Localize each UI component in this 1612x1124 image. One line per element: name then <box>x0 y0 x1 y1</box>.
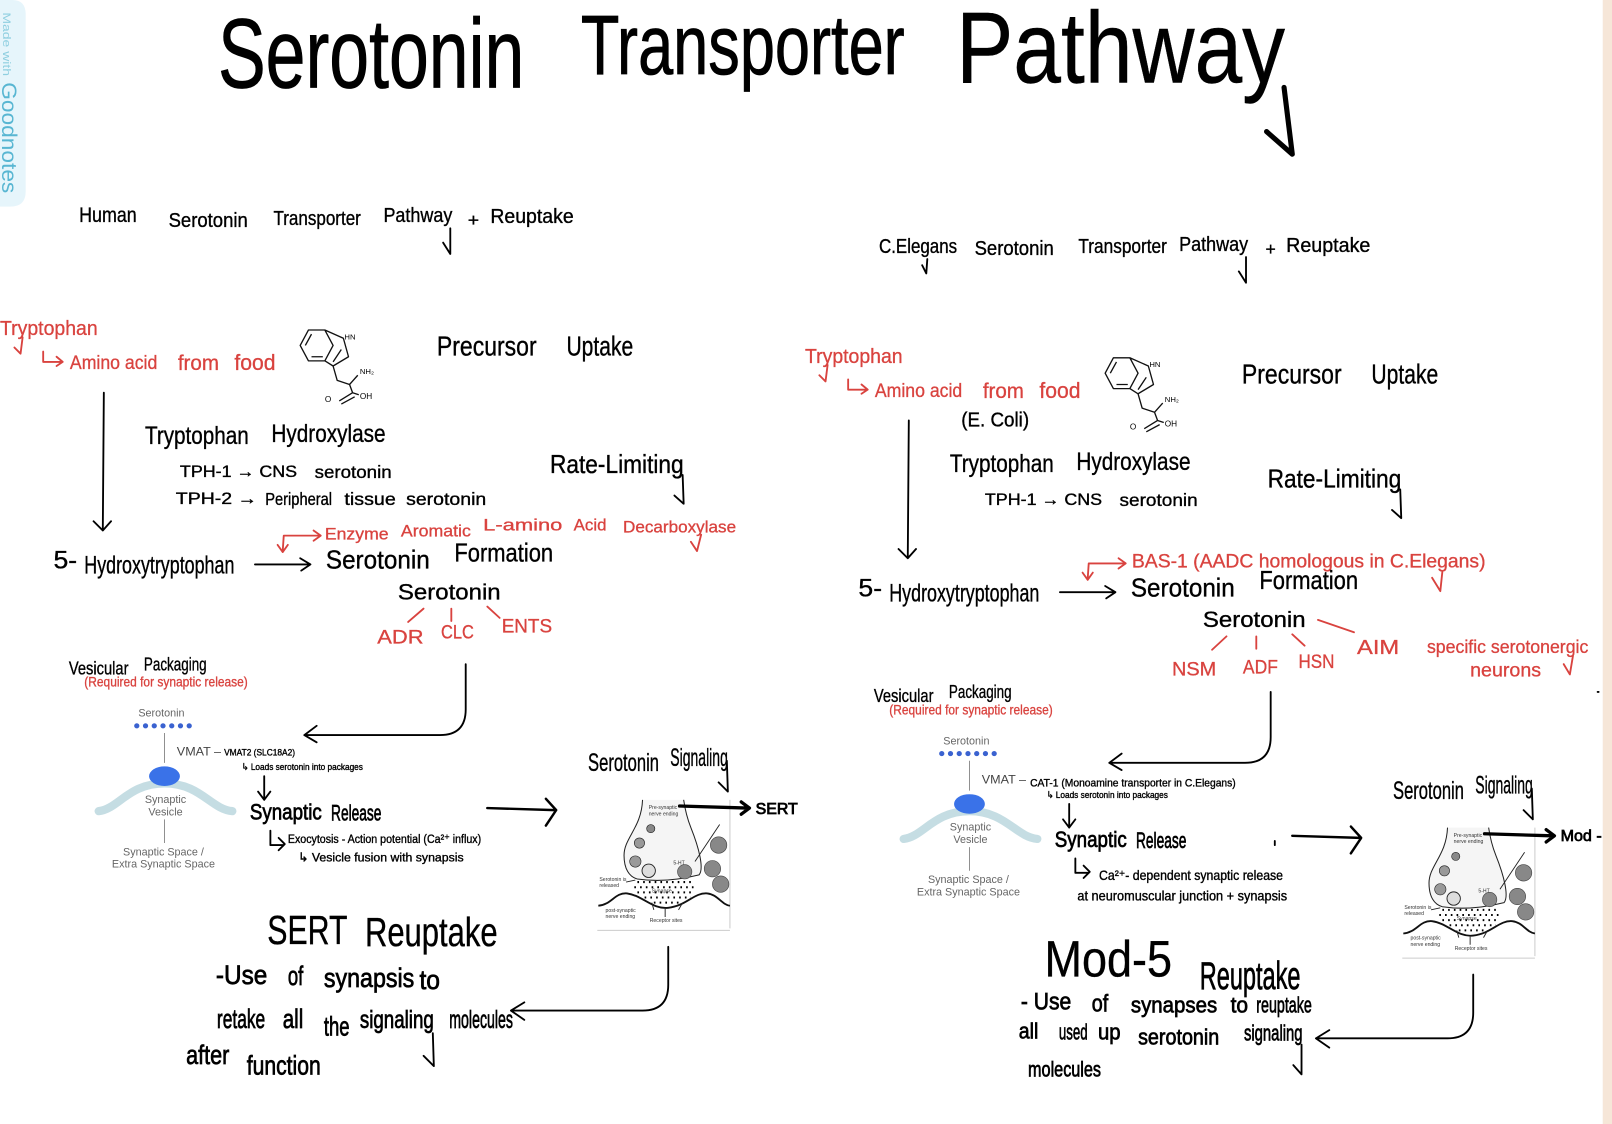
arrow: serotonin to vesicular packaging <box>304 664 466 742</box>
diagram: synapse <box>1402 828 1536 958</box>
label: precursor uptake: Precursor <box>1242 358 1342 389</box>
enzyme: aromatic L-amino acid decarboxylase <box>278 516 736 552</box>
label: synaptic release: Synaptic <box>1055 827 1127 852</box>
label: synaptic release: Synaptic <box>250 799 322 824</box>
precursor: tryptophan note: Amino acid <box>875 380 962 402</box>
heading: vesicular packaging <box>874 681 1053 718</box>
diagram: synapse: post-synaptic <box>1410 936 1441 942</box>
text: SERT reuptake description: after <box>186 1040 229 1070</box>
text: SERT reuptake description: molecules <box>449 1007 513 1034</box>
label: serotonin neurons: AIM <box>1357 636 1399 659</box>
note: VMAT CAT-1: ↳ Loads serotonin into packages <box>1047 790 1168 800</box>
label: precursor uptake: Uptake <box>566 331 633 362</box>
diagram: synapse: Pre-synaptic <box>1454 833 1483 839</box>
arrow: tryptophan to 5-HTP <box>94 393 111 530</box>
label: 5-hydroxytryptophan: Hydroxytryptophan <box>84 553 234 580</box>
enzyme: tryptophan hydroxylase: serotonin <box>315 462 392 482</box>
label: synaptic release: Ca²⁺- dependent synaptic release <box>1099 868 1283 883</box>
heading: human pathway: Serotonin <box>169 209 248 232</box>
label: SERT: SERT <box>756 801 798 818</box>
label: Mod-: Mod - <box>1561 828 1602 845</box>
text: Mod-5 reuptake description <box>1019 990 1312 1081</box>
diagram: synapse: 5-HT <box>1478 888 1491 894</box>
arrow: release to signaling <box>487 799 556 826</box>
label: serotonin neurons: Serotonin <box>398 579 501 604</box>
heading: vesicular packaging <box>69 653 248 690</box>
icon: tryptophan molecule: O <box>1130 423 1136 432</box>
text: SERT reuptake description: synapsis <box>324 963 414 993</box>
precursor: tryptophan note <box>805 345 1080 403</box>
label: serotonin neurons: ADR <box>377 627 424 649</box>
diagram: synaptic vesicle: Vesicle <box>953 834 988 846</box>
enzyme: aromatic L-amino acid decarboxylase: Decarboxylase <box>623 519 736 537</box>
enzyme: tryptophan hydroxylase: tissue <box>344 489 396 509</box>
enzyme: aromatic L-amino acid decarboxylase: Aromatic <box>401 523 471 541</box>
stray pen marks <box>1275 692 1599 845</box>
note: VMAT: VMAT2 (SLC18A2) <box>224 748 295 758</box>
heading: vesicular packaging: Packaging <box>949 681 1012 702</box>
enzyme: tryptophan hydroxylase: Tryptophan <box>145 423 249 450</box>
diagram: synaptic vesicle: Serotonin <box>943 735 989 747</box>
label: serotonin signaling: Serotonin <box>1393 778 1464 805</box>
label: precursor uptake <box>437 331 633 362</box>
label: 5-hydroxytryptophan <box>858 575 1039 607</box>
heading: SERT reuptake: SERT <box>267 907 347 953</box>
text: Mod-5 reuptake description: synapses <box>1131 993 1217 1018</box>
label: synaptic release: Release <box>331 800 381 825</box>
heading: human pathway: Human <box>79 202 137 227</box>
label: precursor uptake: Precursor <box>437 331 537 362</box>
text: Mod-5 reuptake description: signaling <box>1244 1020 1303 1045</box>
precursor: tryptophan note: from <box>983 378 1024 403</box>
diagram: synapse: 5-HT <box>673 861 686 867</box>
enzyme: tryptophan hydroxylase: serotonin <box>1120 490 1198 510</box>
text: SERT reuptake description: the <box>324 1011 350 1041</box>
label: serotonin neurons: ENTS <box>502 615 552 637</box>
text: Mod-5 reuptake description: used <box>1059 1019 1088 1044</box>
icon: tryptophan molecule: NH₂ <box>1165 395 1179 404</box>
label: serotonin formation <box>326 539 553 575</box>
diagram: synaptic vesicle: Synaptic <box>950 822 992 834</box>
diagram: synapse: Synapse <box>652 888 672 894</box>
label: serotonin formation <box>1131 567 1358 602</box>
icon: tryptophan molecule: NH₂ <box>360 367 374 376</box>
label: rate-limiting <box>1268 465 1401 518</box>
enzyme: tryptophan hydroxylase: Hydroxylase <box>1076 449 1190 476</box>
label: synaptic release: at neuromuscular junction + synapsis <box>1077 889 1287 904</box>
icon: tryptophan molecule: HN <box>344 332 356 341</box>
diagram: synapse <box>597 800 731 930</box>
diagram: synaptic vesicle: Synaptic Space / <box>123 846 204 858</box>
arrow: signaling to SERT reuptake <box>511 947 668 1020</box>
precursor: tryptophan note: Tryptophan <box>0 317 98 340</box>
diagram: synapse: post-synaptic <box>606 908 636 914</box>
label: serotonin neurons <box>377 579 552 649</box>
text: Mod-5 reuptake description: all <box>1019 1018 1038 1043</box>
text: Mod-5 reuptake description: up <box>1098 1019 1121 1044</box>
icon: tryptophan molecule: OH <box>1165 420 1177 429</box>
heading: human pathway: Transporter <box>273 207 361 230</box>
precursor: tryptophan note: Tryptophan <box>805 345 903 368</box>
diagram: synaptic vesicle <box>904 735 1037 898</box>
heading: SERT reuptake: Reuptake <box>365 909 498 955</box>
label: synaptic release <box>1055 827 1287 904</box>
label: serotonin neurons: Serotonin <box>1203 607 1306 632</box>
panel: human pathway <box>0 202 798 1080</box>
label: precursor uptake: Uptake <box>1371 358 1438 389</box>
arrow: VMAT to synaptic release <box>258 776 270 800</box>
label: 5-hydroxytryptophan: 5- <box>53 548 77 575</box>
label: serotonin formation: Serotonin <box>1131 574 1235 602</box>
text: Mod-5 reuptake description: serotonin <box>1138 1025 1219 1050</box>
icon: tryptophan molecule: HN <box>1149 360 1161 369</box>
label: synaptic release: ↳ Vesicle fusion with synapsis <box>298 851 464 865</box>
heading: vesicular packaging: (Required for synaptic release) <box>889 703 1053 718</box>
heading: human pathway: Reuptake <box>490 205 574 228</box>
heading: human pathway: Pathway <box>383 204 453 227</box>
text: SERT reuptake description: to <box>419 965 440 995</box>
arrow: serotonin to vesicular packaging <box>1109 692 1271 770</box>
arrow: 5-HTP to serotonin <box>255 558 310 571</box>
text: Mod-5 reuptake description: reuptake <box>1256 993 1312 1018</box>
arrow: VMAT to synaptic release <box>1063 804 1075 828</box>
label: serotonin neurons: neurons <box>1470 659 1541 681</box>
panel: C. elegans pathway <box>805 233 1602 1081</box>
badge: Made with Goodnotes: Made with <box>0 12 12 76</box>
enzyme: tryptophan hydroxylase: serotonin <box>406 489 486 509</box>
diagram: synaptic vesicle <box>99 708 232 871</box>
diagram: synapse: released <box>599 883 619 889</box>
label: rate-limiting: Rate-Limiting <box>1268 465 1401 493</box>
arrow: release to signaling <box>1292 827 1361 853</box>
heading: SERT reuptake <box>267 907 498 955</box>
text: SERT reuptake description: all <box>283 1004 303 1034</box>
label: 5-hydroxytryptophan: Hydroxytryptophan <box>889 580 1039 607</box>
enzyme: aromatic L-amino acid decarboxylase: Enzyme <box>325 526 389 544</box>
enzyme: tryptophan hydroxylase <box>950 449 1198 510</box>
enzyme: tryptophan hydroxylase: TPH-1 → CNS <box>180 463 297 481</box>
label: serotonin neurons: NSM <box>1172 658 1216 680</box>
note: VMAT: ↳ Loads serotonin into packages <box>242 762 363 772</box>
diagram: synaptic vesicle: Vesicle <box>148 806 183 818</box>
diagram: synapse: nerve ending <box>1410 942 1440 948</box>
label: serotonin neurons: ADF <box>1243 656 1278 678</box>
note: VMAT: VMAT – <box>177 745 221 759</box>
heading: human pathway <box>79 202 574 254</box>
diagram: synapse: Serotonin is <box>1404 905 1432 911</box>
icon: tryptophan molecule: O <box>325 395 331 404</box>
label: serotonin signaling: Serotonin <box>588 750 659 777</box>
heading: C. elegans pathway <box>879 233 1370 283</box>
heading: vesicular packaging: Packaging <box>144 653 207 674</box>
label: synaptic release: Exocytosis - Action potential (Ca²⁺ influx) <box>288 832 481 846</box>
text: SERT reuptake description: signaling <box>360 1007 434 1034</box>
label: rate-limiting <box>550 451 684 504</box>
arrow: signaling to Mod-5 reuptake <box>1316 975 1473 1048</box>
heading: vesicular packaging: Vesicular <box>69 657 129 678</box>
diagram: synaptic vesicle: Extra Synaptic Space <box>917 886 1020 898</box>
right edge strip <box>1603 0 1612 1124</box>
arrow: 5-HTP to serotonin <box>1060 586 1115 598</box>
heading: vesicular packaging: Vesicular <box>874 685 933 706</box>
label: serotonin signaling <box>1393 773 1533 819</box>
label: 5-hydroxytryptophan: 5- <box>858 575 882 602</box>
heading: Mod-5 reuptake <box>1045 930 1300 998</box>
note: VMAT CAT-1: CAT-1 (Monoamine transporter in C.Elegans) <box>1030 777 1236 789</box>
text: Mod-5 reuptake description: of <box>1092 992 1109 1018</box>
diagram: synapse: Receptor sites <box>650 918 683 924</box>
text: SERT reuptake description <box>186 960 513 1080</box>
label: serotonin neurons: CLC <box>441 621 474 643</box>
badge: Made with Goodnotes <box>0 0 26 207</box>
diagram: synaptic vesicle: Synaptic Space / <box>928 874 1009 886</box>
diagram: synapse: Receptor sites <box>1455 946 1488 952</box>
title: Serotonin <box>218 0 524 108</box>
enzyme: tryptophan hydroxylase <box>145 421 486 509</box>
diagram: synapse: nerve ending <box>1454 839 1483 845</box>
text: SERT reuptake description: retake <box>217 1004 265 1034</box>
label: rate-limiting: Rate-Limiting <box>550 451 684 479</box>
title: Transporter <box>581 0 905 92</box>
label: 5-hydroxytryptophan <box>53 548 234 580</box>
diagram: synapse: Pre-synaptic <box>649 805 678 811</box>
icon: tryptophan molecule <box>1105 358 1179 432</box>
text: Mod-5 reuptake description: to <box>1231 993 1248 1018</box>
text: SERT reuptake description: -Use <box>216 960 267 990</box>
arrow: signaling to Mod-5 <box>1485 830 1554 842</box>
text: Mod-5 reuptake description: molecules <box>1028 1056 1101 1081</box>
label: serotonin neurons <box>1172 607 1588 681</box>
enzyme: aromatic L-amino acid decarboxylase: L-amino <box>483 516 562 534</box>
arrow: tryptophan to 5-HTP <box>899 420 916 558</box>
icon: tryptophan molecule <box>300 330 374 404</box>
heading: Mod-5 reuptake: Reuptake <box>1200 955 1300 998</box>
heading: C. elegans pathway: C.Elegans <box>879 235 957 258</box>
label: precursor uptake <box>1242 358 1438 389</box>
title <box>218 0 1292 154</box>
text: SERT reuptake description: of <box>288 961 304 991</box>
precursor: tryptophan note: Amino acid <box>70 352 157 374</box>
diagram: synapse: Serotonin is <box>599 877 627 883</box>
enzyme: BAS-1: BAS-1 (AADC homologous in C.Elegans) <box>1132 551 1486 573</box>
icon: tryptophan molecule: OH <box>360 392 372 401</box>
precursor: tryptophan note: from <box>178 350 219 375</box>
diagram: synapse: nerve ending <box>649 811 678 817</box>
label: serotonin formation: Formation <box>1259 567 1358 595</box>
enzyme: tryptophan hydroxylase: TPH-2 → <box>176 490 257 508</box>
label: synaptic release <box>250 799 481 865</box>
enzyme: tryptophan hydroxylase: Hydroxylase <box>271 421 386 448</box>
heading: human pathway: + <box>468 210 479 230</box>
heading: C. elegans pathway: Pathway <box>1179 233 1249 256</box>
label: serotonin formation: Serotonin <box>326 547 430 575</box>
enzyme: BAS-1 <box>1083 551 1486 591</box>
text: Mod-5 reuptake description: - Use <box>1021 990 1071 1016</box>
diagram: synapse: Synapse <box>1457 916 1477 922</box>
heading: C. elegans pathway: Serotonin <box>975 237 1054 260</box>
heading: C. elegans pathway: + <box>1266 239 1276 259</box>
diagram: synaptic vesicle: Extra Synaptic Space <box>112 859 215 871</box>
note: VMAT CAT-1 <box>982 772 1236 800</box>
note: VMAT <box>177 745 363 772</box>
label: serotonin formation: Formation <box>454 539 553 567</box>
label: serotonin signaling <box>588 745 728 792</box>
enzyme: tryptophan hydroxylase: TPH-1 → CNS <box>985 491 1102 509</box>
diagram: synapse: nerve ending <box>606 914 635 920</box>
label: serotonin neurons: HSN <box>1298 651 1334 673</box>
label: serotonin signaling: Signaling <box>1475 773 1533 800</box>
diagram: synapse: released <box>1404 911 1424 917</box>
diagram: synaptic vesicle: Serotonin <box>138 708 184 720</box>
heading: C. elegans pathway: Transporter <box>1078 235 1167 258</box>
diagram: synaptic vesicle: Synaptic <box>145 794 187 806</box>
label: E. coli: (E. Coli) <box>961 409 1029 432</box>
enzyme: tryptophan hydroxylase: Peripheral <box>265 489 332 509</box>
heading: C. elegans pathway: Reuptake <box>1286 234 1370 257</box>
precursor: tryptophan note <box>0 317 276 375</box>
label: synaptic release: Release <box>1136 828 1186 853</box>
heading: vesicular packaging: (Required for synaptic release) <box>84 675 248 690</box>
enzyme: aromatic L-amino acid decarboxylase: Acid <box>574 516 607 534</box>
text: SERT reuptake description: function <box>247 1050 321 1080</box>
note: VMAT CAT-1: VMAT – <box>982 772 1026 786</box>
precursor: tryptophan note: food <box>1039 378 1080 403</box>
label: serotonin signaling: Signaling <box>670 745 728 772</box>
heading: Mod-5 reuptake: Mod-5 <box>1045 930 1172 988</box>
arrow: signaling to SERT <box>680 802 749 814</box>
enzyme: tryptophan hydroxylase: Tryptophan <box>950 451 1054 478</box>
precursor: tryptophan note: food <box>234 350 276 375</box>
label: serotonin neurons: specific serotonergic <box>1427 636 1588 657</box>
